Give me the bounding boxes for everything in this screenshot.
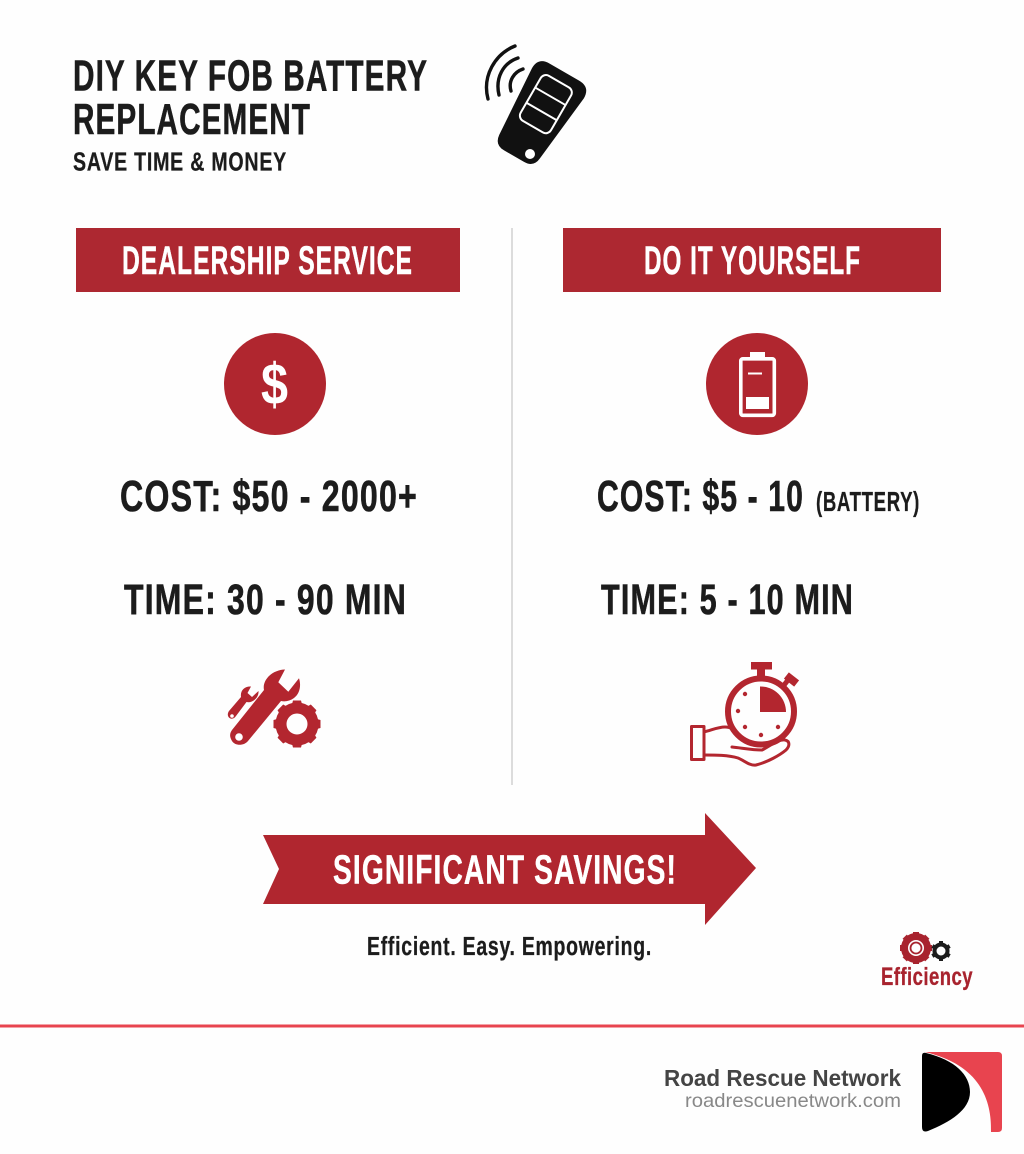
arrow: significant savings xyxy=(263,813,756,925)
diy cost: COST: $5 - 10 xyxy=(597,472,804,521)
icon: wrenches and gear xyxy=(228,670,320,748)
efficiency badge xyxy=(881,932,973,991)
title block xyxy=(73,52,428,176)
banner: dealership service: DEALERSHIP SERVICE xyxy=(122,239,413,283)
icon: key fob with signal waves xyxy=(487,46,590,172)
title block: REPLACEMENT xyxy=(73,95,311,144)
icon: dollar circle: $ xyxy=(261,352,288,417)
icon: stopwatch in hand xyxy=(692,662,799,765)
dealership cost: COST: $50 - 2000+ xyxy=(120,472,418,521)
banner: do it yourself xyxy=(563,228,941,292)
dealership time: TIME: 30 - 90 MIN xyxy=(124,576,407,624)
tagline: Efficient. Easy. Empowering. xyxy=(367,933,652,961)
efficiency badge: Efficiency xyxy=(881,963,973,991)
panel: do it yourself xyxy=(563,228,941,765)
logo xyxy=(922,1052,1002,1132)
icon: dollar circle xyxy=(224,333,326,435)
banner: dealership service xyxy=(76,228,460,292)
icon: battery circle xyxy=(706,333,808,435)
footer rule xyxy=(0,1024,1024,1028)
banner: do it yourself: DO IT YOURSELF xyxy=(644,239,861,283)
center divider xyxy=(511,228,513,785)
footer brand xyxy=(664,1052,1002,1132)
diy cost: (BATTERY) xyxy=(816,486,920,517)
diy time: TIME: 5 - 10 MIN xyxy=(601,576,854,624)
arrow: significant savings: SIGNIFICANT SAVINGS! xyxy=(333,846,677,892)
title block: DIY KEY FOB BATTERY xyxy=(73,52,428,100)
panel: dealership service xyxy=(76,228,460,748)
brand name: Road Rescue Network xyxy=(664,1065,901,1091)
title block: SAVE TIME & MONEY xyxy=(73,148,287,176)
brand url: roadrescuenetwork.com xyxy=(685,1090,901,1112)
